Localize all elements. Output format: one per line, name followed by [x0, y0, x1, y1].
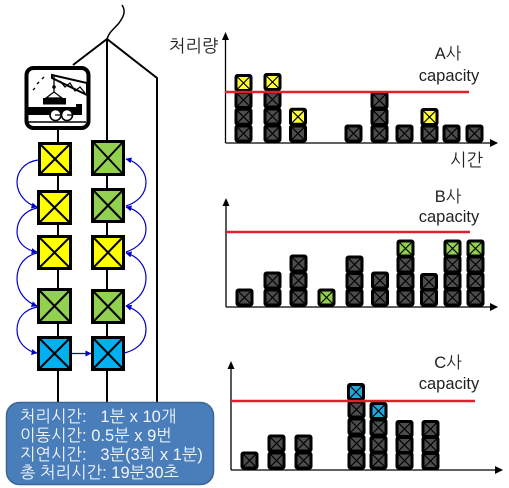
- arrows: move flow between boxes: [17, 159, 146, 354]
- y axis arrowhead: [222, 198, 230, 206]
- y axis label: 처리량: [169, 36, 218, 56]
- chart: C사: [228, 354, 502, 470]
- capacity line: [231, 400, 475, 402]
- wiring lines: [58, 5, 157, 402]
- company label: B사: [435, 188, 462, 206]
- y axis arrowhead: [228, 361, 234, 369]
- axes: [226, 37, 497, 143]
- capacity line: [225, 91, 469, 93]
- bars: [237, 241, 483, 305]
- x axis label: 시간: [450, 150, 483, 170]
- capacity label: capacity: [419, 67, 480, 85]
- y axis arrowhead: [222, 32, 229, 40]
- company label: A사: [435, 45, 462, 63]
- right column of process boxes: [92, 142, 124, 370]
- capacity label: capacity: [419, 375, 480, 393]
- left column of process boxes: [38, 144, 70, 370]
- axes: [231, 367, 502, 470]
- company label: C사: [434, 354, 462, 372]
- chart: A사: [169, 32, 497, 170]
- panel: time summary: 처리시간: 1분 x 10개: [20, 408, 176, 426]
- panel: time summary: 이동시간: 0.5분 x 9번: [20, 427, 172, 445]
- capacity label: capacity: [419, 208, 480, 226]
- bars: [242, 384, 438, 468]
- panel: time summary: [6, 402, 214, 484]
- icon: crane on flatbed: [26, 68, 88, 128]
- chart: B사: [222, 188, 497, 307]
- panel: time summary: 지연시간: 3분(3회 x 1분): [20, 446, 203, 464]
- panel: time summary: 총 처리시간: 19분30초: [20, 464, 180, 482]
- axes: [226, 204, 497, 307]
- bars: [236, 74, 482, 141]
- capacity line: [226, 231, 470, 233]
